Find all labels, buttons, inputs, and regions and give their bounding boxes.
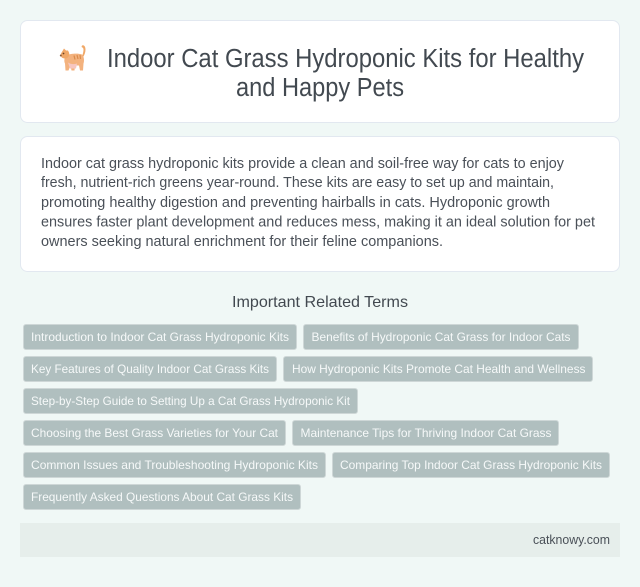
chip (24, 452, 326, 478)
chip: Comparing Top Indoor Cat Grass Hydroponic Kits (340, 458, 602, 472)
chip: Key Features of Quality Indoor Cat Grass Kits (31, 362, 269, 376)
chip (24, 356, 276, 382)
chip (24, 388, 358, 414)
chip: Frequently Asked Questions About Cat Grass Kits (31, 490, 293, 504)
description text: ensures faster plant development and reduces mess, making it an ideal solution for pet (41, 214, 595, 230)
title: Indoor Cat Grass Hydroponic Kits for Healthy (107, 45, 584, 73)
chip (24, 324, 296, 350)
description text: Indoor cat grass hydroponic kits provide a clean and soil-free way for cats to enjoy (41, 156, 565, 172)
panel: description (20, 136, 620, 272)
panel: title card (20, 20, 620, 122)
chip (332, 452, 610, 478)
chip (24, 484, 300, 510)
description text (41, 156, 595, 250)
chip: Common Issues and Troubleshooting Hydroponic Kits (31, 458, 318, 472)
icon: cat emoji (60, 45, 86, 70)
chip: How Hydroponic Kits Promote Cat Health and Wellness (292, 362, 586, 376)
chip (304, 324, 578, 350)
chip (292, 420, 558, 446)
chip: Maintenance Tips for Thriving Indoor Cat Grass (300, 426, 552, 440)
chip: Benefits of Hydroponic Cat Grass for Indoor Cats (312, 330, 570, 344)
footer (20, 523, 620, 557)
chip (284, 356, 592, 382)
heading: related terms: Important Related Terms (232, 294, 408, 311)
description text: fresh, nutrient-rich greens year-round. These kits are easy to set up and maintain, (41, 175, 554, 191)
title: and Happy Pets (236, 74, 404, 102)
description text: promoting healthy digestion and preventing hairballs in cats. Hydroponic growth (41, 195, 550, 211)
panel: term chips (24, 324, 610, 510)
footer: catknowy.com (533, 533, 610, 547)
description text: owners seeking natural enrichment for their feline companions. (41, 234, 443, 250)
chip: Step-by-Step Guide to Setting Up a Cat Grass Hydroponic Kit (31, 394, 351, 408)
chip: Choosing the Best Grass Varieties for Your Cat (31, 426, 279, 440)
chip: Introduction to Indoor Cat Grass Hydroponic Kits (31, 330, 289, 344)
title (107, 45, 584, 102)
chip (24, 420, 286, 446)
